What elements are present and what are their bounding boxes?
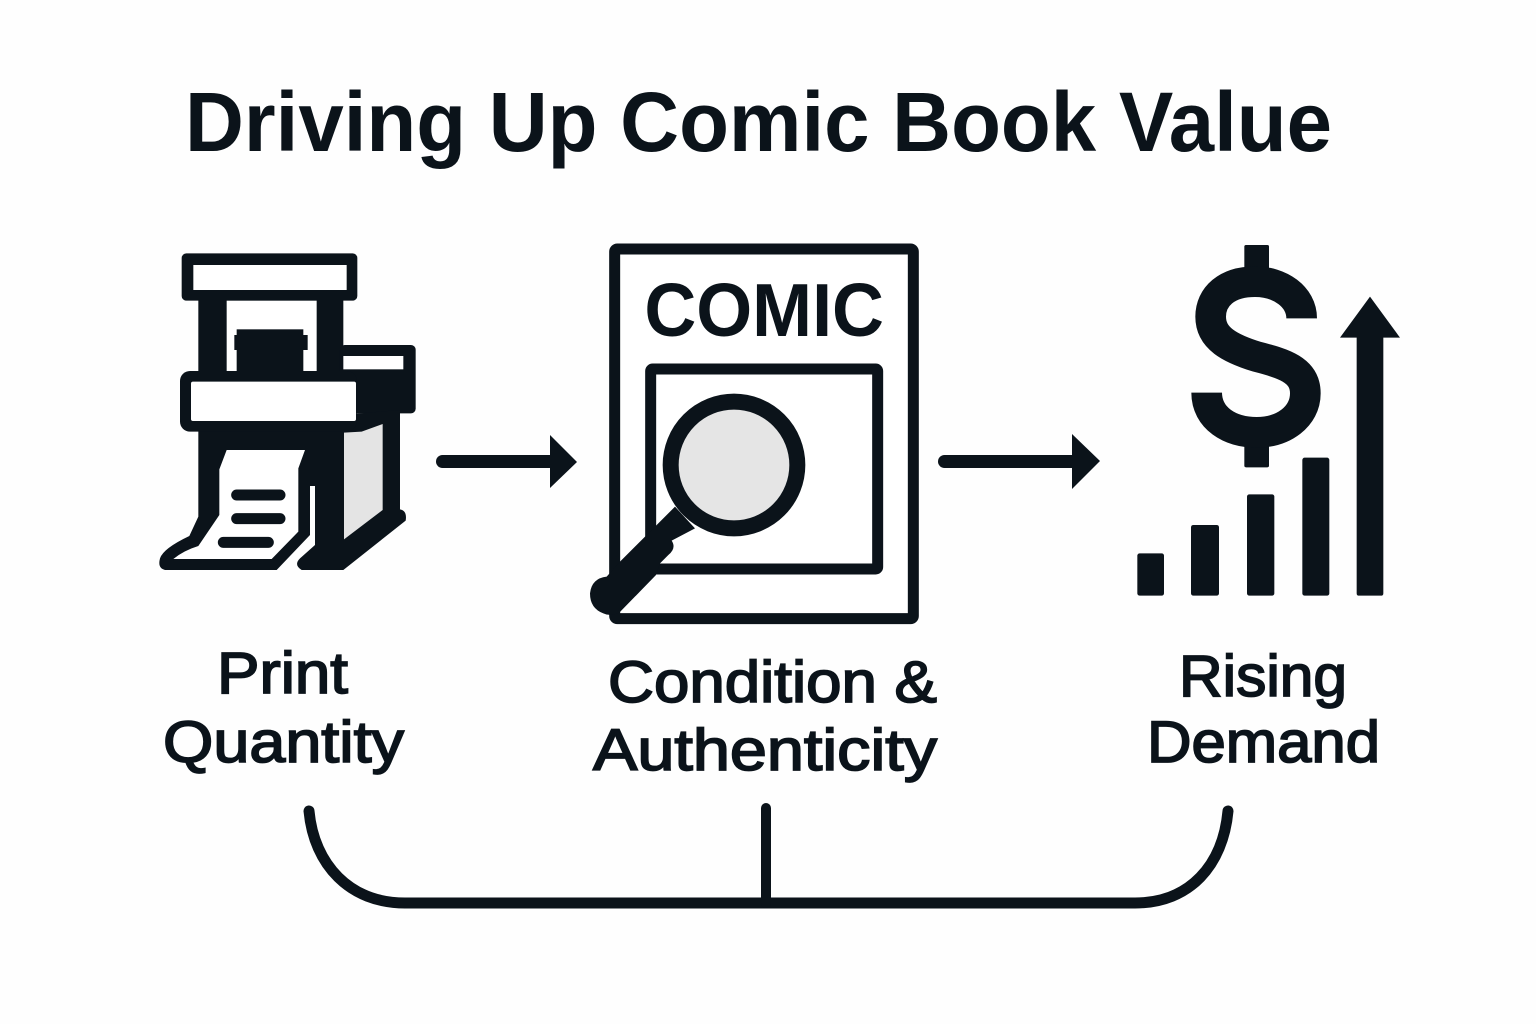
title: Driving Up Comic Book Value xyxy=(185,75,1332,169)
magnifying glass xyxy=(590,402,797,615)
label: print quantity: Quantity xyxy=(163,710,404,775)
label: print quantity xyxy=(163,641,404,775)
arrow: press to comic xyxy=(436,435,577,488)
label: rising demand: Rising xyxy=(1179,644,1347,709)
bracket joining the three factors xyxy=(309,808,1228,903)
label: rising demand: Demand xyxy=(1147,710,1380,775)
label: condition and authenticity: Condition & xyxy=(608,650,937,715)
comic cover word: COMIC xyxy=(644,268,884,352)
label: rising demand xyxy=(1147,644,1380,775)
icon: printing press xyxy=(159,253,416,570)
label: condition and authenticity: Authenticity xyxy=(593,718,937,783)
label: print quantity: Print xyxy=(217,641,348,706)
label: condition and authenticity xyxy=(593,650,937,783)
arrow: comic to demand xyxy=(938,434,1100,489)
icon: dollar sign with rising bars and arrow xyxy=(1137,245,1400,596)
icon: comic under magnifying glass xyxy=(590,249,913,619)
